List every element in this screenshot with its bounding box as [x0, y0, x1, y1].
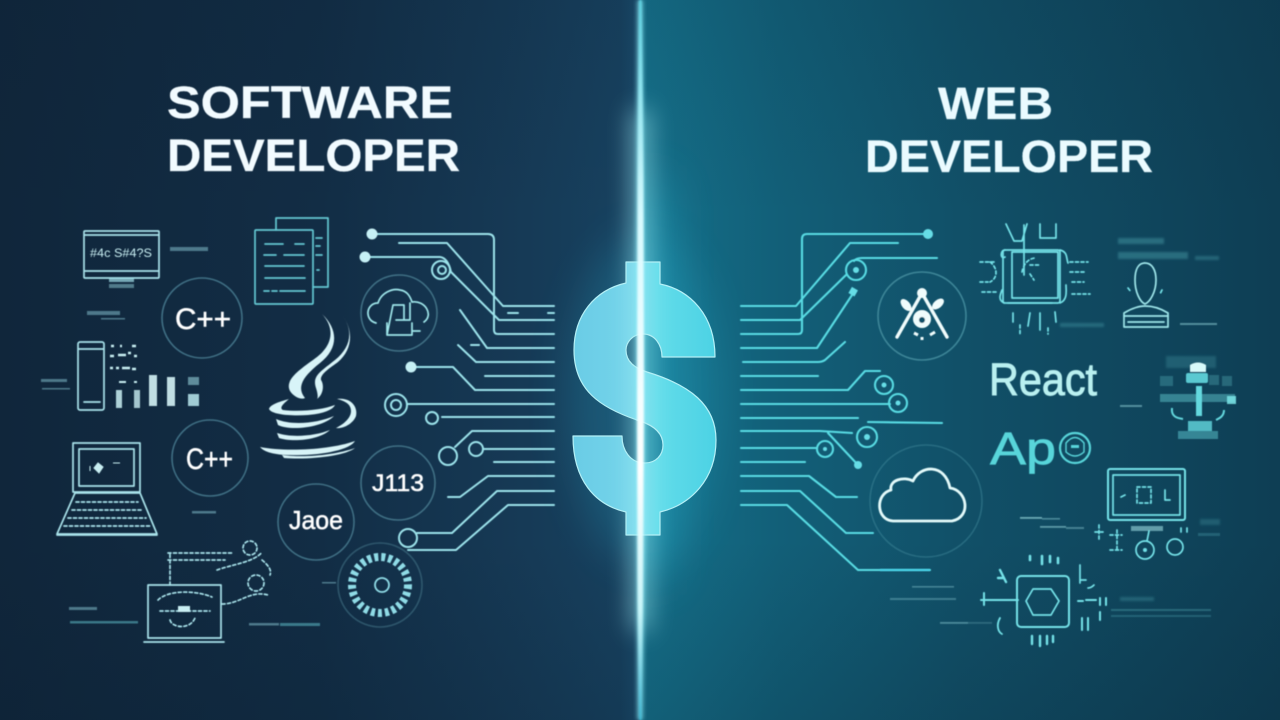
- icon: c++ badge: [162, 278, 242, 358]
- icon: phone with bars: [78, 342, 199, 410]
- icon: desktop monitor: #4c S#4?S: [90, 246, 152, 260]
- panel: software developer icons: [41, 218, 437, 642]
- icon: c++ badge: C++: [175, 303, 231, 336]
- icon: documents: [255, 218, 328, 304]
- icon: code wheel: [322, 543, 422, 627]
- icon: cloud badge right: [870, 445, 982, 557]
- icon: java label badge: Jaoe: [289, 505, 343, 535]
- api label with badge: Ap: [990, 423, 1056, 474]
- api label with badge: [990, 423, 1090, 474]
- icon: c++ badge lower: [172, 420, 248, 496]
- icon: java cup: [260, 314, 356, 459]
- icon: java label badge: [278, 484, 354, 560]
- heading: software developer: [167, 77, 460, 181]
- icon: c++ badge lower: C++: [186, 443, 233, 476]
- heading: web developer: WEB: [938, 78, 1053, 129]
- icon: chip: [980, 224, 1090, 334]
- icon: robot block cluster: [1160, 356, 1236, 439]
- chart: right circuit lines: [741, 229, 942, 570]
- icon: cloud badge: [361, 275, 437, 351]
- icon: version badge: J113: [372, 470, 424, 497]
- heading: web developer: DEVELOPER: [865, 131, 1153, 182]
- lower caption bars right: [880, 517, 1220, 624]
- panel: web developer icons: [870, 224, 1236, 646]
- icon: person bust: [1124, 263, 1168, 327]
- centre glow: [566, 180, 722, 580]
- icon: laptop flow diagram: [69, 541, 320, 642]
- heading: software developer: DEVELOPER: [167, 130, 460, 181]
- heading: software developer: SOFTWARE: [167, 77, 453, 128]
- centre light beam: [632, 0, 649, 720]
- icon: laptop: [57, 443, 216, 535]
- icon: right monitor: [1095, 469, 1187, 559]
- icon: framework badge: [878, 272, 966, 360]
- heading: web developer: [865, 78, 1153, 182]
- icon: desktop monitor: [84, 231, 208, 288]
- blurred caption bars top right: [1060, 238, 1219, 407]
- small caption bars: [41, 311, 125, 390]
- icon: hub square: [981, 556, 1106, 646]
- react label: React: [989, 354, 1097, 405]
- icon: dollar sign: [573, 262, 716, 535]
- chart: left circuit lines: [360, 228, 554, 550]
- icon: version badge: [361, 446, 435, 520]
